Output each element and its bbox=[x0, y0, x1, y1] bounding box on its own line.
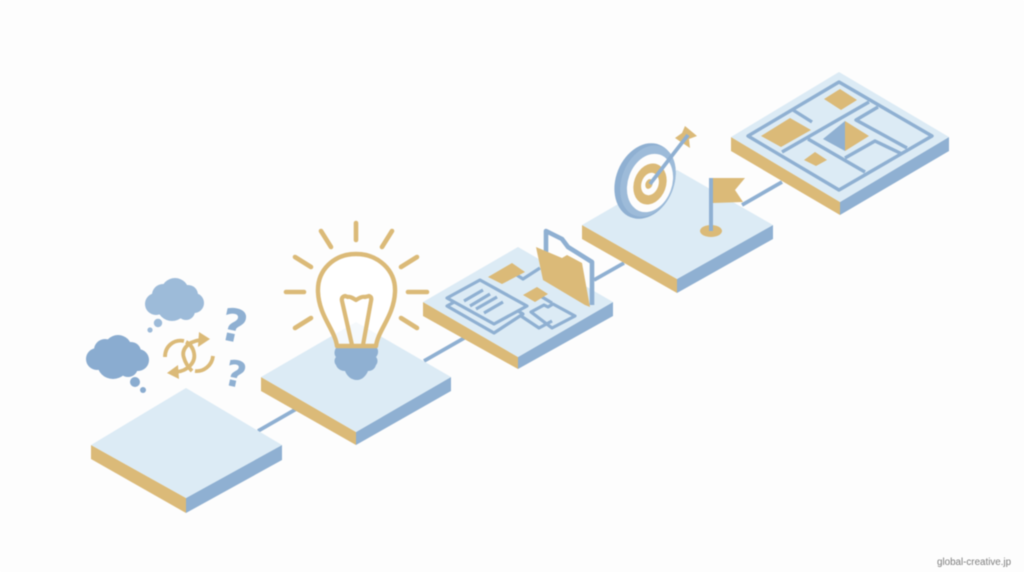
platform 1 bbox=[91, 388, 282, 513]
watermark: global-creative.jp bbox=[937, 557, 1012, 568]
connector lines between platforms bbox=[258, 182, 782, 431]
icon: light bulb bbox=[286, 223, 427, 380]
icon: small question mark: ? bbox=[221, 353, 250, 397]
icon: target with arrow bbox=[604, 126, 697, 228]
platform 3 bbox=[423, 247, 613, 369]
icon: large question mark: ? bbox=[216, 297, 252, 355]
icon: upper thought cloud bbox=[145, 278, 204, 333]
platform 5 bbox=[731, 72, 949, 215]
icon: bulb rays bbox=[286, 223, 427, 328]
icon: circular arrows bbox=[165, 332, 213, 379]
platform 4 bbox=[582, 170, 773, 293]
map layout on platform 5 bbox=[748, 82, 932, 190]
icon: lower thought cloud bbox=[86, 335, 149, 393]
icon: flag bbox=[700, 178, 745, 237]
icon: documents and folder bbox=[447, 231, 592, 333]
platform 2 bbox=[261, 322, 451, 445]
